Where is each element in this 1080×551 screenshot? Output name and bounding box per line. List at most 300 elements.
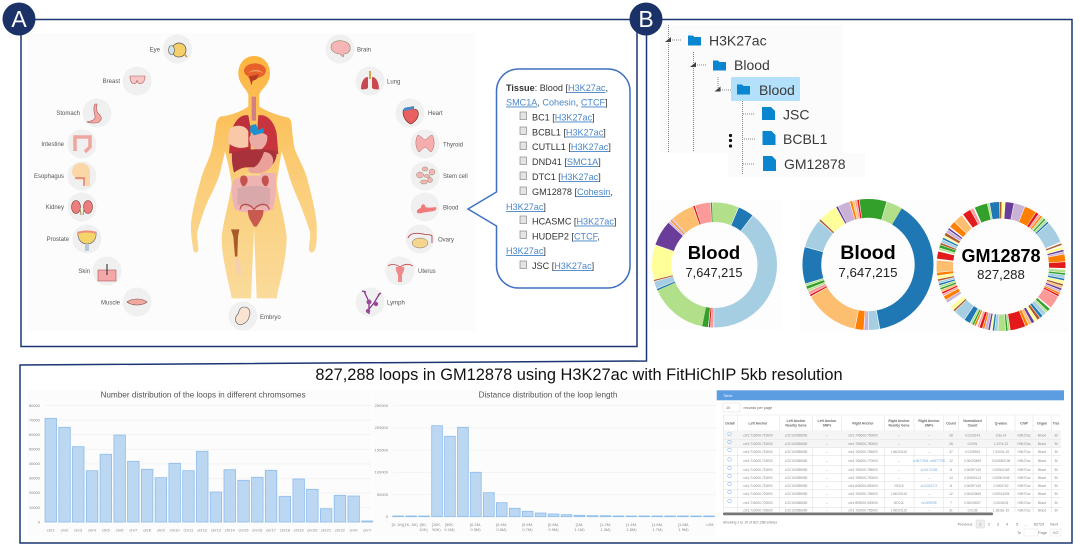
pagination: 2 <box>988 522 990 526</box>
y axis labels: 60000 <box>29 432 41 437</box>
table rows: chr1:755000-760000 <box>848 442 878 446</box>
table rows: H3K27ac <box>1017 468 1031 472</box>
icon: muscle <box>101 288 152 316</box>
table rows: -- <box>898 434 900 438</box>
table rows: chr1:760000-765000 <box>848 508 878 512</box>
x axis labels: [1.4M, <box>626 522 637 527</box>
icon: stomach <box>56 98 112 128</box>
tree labels <box>709 32 846 172</box>
column headers: Organ <box>1037 422 1047 426</box>
table rows: Bl <box>1055 434 1058 438</box>
table rows: H3K27ac <box>1017 450 1031 454</box>
icon: stem cell: Stem cell <box>443 174 468 180</box>
organ: intestines <box>232 173 276 213</box>
callout text lines: DND41 [SMC1A] <box>532 157 601 167</box>
column headers: Left Anchor <box>818 419 837 423</box>
donut: Blood (cell level, dark) <box>789 185 947 344</box>
x axis labels: [0.2M, <box>470 522 481 527</box>
table rows: chr1:745000-750000 <box>848 434 878 438</box>
y axis labels: 20000 <box>29 490 41 495</box>
badge B <box>630 2 662 36</box>
table rows: 28 <box>949 442 953 446</box>
x axis labels: 1.3M) <box>600 527 611 532</box>
icon: eye: Eye <box>150 48 161 54</box>
table rows: 28 <box>949 434 953 438</box>
table rows: H3K27ac <box>1017 501 1031 505</box>
table rows: -- <box>826 468 828 472</box>
heading: loops summary: 827,288 loops in GM12878 using H3K27ac with FitHiChIP 5kb resolution <box>315 366 843 384</box>
y axis labels: 80000 <box>29 403 41 408</box>
table rows: Blood <box>1038 468 1046 472</box>
icon: prostate <box>47 224 102 254</box>
organ: ovaries <box>240 204 269 209</box>
table rows: chr1:710000-715000 <box>743 476 773 480</box>
table rows: LOC100288069 <box>785 492 807 496</box>
icon: ovary <box>406 224 454 254</box>
organ: kidneys <box>240 175 269 186</box>
table rows: 0.00249007 <box>964 501 981 505</box>
icon: lung: Lung <box>387 80 400 86</box>
x axis labels: [0.8M, <box>548 522 559 527</box>
tree labels: H3K27ac <box>709 32 767 48</box>
callout text lines <box>506 83 616 271</box>
table rows: Bl <box>1055 501 1058 505</box>
x axis labels: >2M <box>706 522 713 527</box>
icon: blood <box>410 192 458 222</box>
table rows: Blood <box>1038 484 1046 488</box>
table rows: -- <box>898 468 900 472</box>
column headers: Nearby Gene <box>889 424 910 428</box>
pagination: Previous <box>958 522 972 526</box>
table rows: H3K27ac <box>1017 492 1031 496</box>
icon: thyroid <box>410 130 463 158</box>
badge A <box>2 2 36 36</box>
table rows: 7 <box>950 501 952 505</box>
x axis labels: chr21 <box>321 528 332 532</box>
icon: blood: Blood <box>443 206 458 212</box>
column headers: Left Anchor <box>749 422 768 426</box>
x axis labels: chr11 <box>184 528 194 532</box>
table rows: chr1:845000-850000 <box>848 484 878 488</box>
icon: prostate: Prostate <box>47 237 70 243</box>
donut: GM12878 <box>921 187 1080 346</box>
table rows: Blood <box>1038 476 1046 480</box>
table rows: -- <box>826 492 828 496</box>
table rows: Bl <box>1055 492 1058 496</box>
callout text lines: BCBL1 [H3K27ac] <box>532 128 606 138</box>
organ: breast tissue <box>228 126 248 148</box>
table rows: H3K27ac <box>1017 476 1031 480</box>
table rows: chr1:780000-785000 <box>848 468 878 472</box>
x axis labels: 1.5M) <box>626 527 637 532</box>
table rows: -- <box>928 434 930 438</box>
table rows: Blood <box>1038 450 1046 454</box>
icon: esophagus <box>34 162 96 190</box>
table rows: Blood <box>1038 492 1046 496</box>
table rows: chr1:710000-715000 <box>743 450 773 454</box>
table rows: Blood <box>1038 459 1046 463</box>
organ: left lung <box>229 115 251 153</box>
callout text lines: SMC1A, Cohesin, CTCF] <box>506 98 608 108</box>
x axis labels: chr3 <box>74 528 83 532</box>
column headers: ChIP <box>1020 422 1029 426</box>
table rows: chr1:710000-715000 <box>743 434 773 438</box>
table rows: 1.3816e-15 <box>993 508 1009 512</box>
table rows: LINC00115 <box>891 508 907 512</box>
tree labels: BCBL1 <box>783 131 828 147</box>
detail magnifier icons <box>728 432 731 503</box>
column headers: Tiss <box>1053 422 1059 426</box>
column headers: Count <box>946 422 957 426</box>
table rows: chr1:710000-715000 <box>743 484 773 488</box>
icon: kidney: Kidney <box>46 205 64 211</box>
x axis labels: [5K, <box>420 522 427 527</box>
table rows: LOC100288069 <box>785 434 807 438</box>
table rows: 1.227e-12 <box>994 442 1008 446</box>
table rows: chr1:785000-790000 <box>848 476 878 480</box>
x axis labels <box>392 522 713 532</box>
icon: intestine <box>41 130 96 158</box>
table rows: -- <box>928 442 930 446</box>
table rows: -- <box>928 450 930 454</box>
table rows: -- <box>826 484 828 488</box>
icon: brain: Brain <box>357 48 371 54</box>
table rows: Bl <box>1055 459 1058 463</box>
icon: skin: Skin <box>78 269 90 275</box>
column headers: Right Anchor <box>918 419 940 423</box>
table rows: ISG15 <box>894 484 904 488</box>
icon: lymph: Lymph <box>387 300 405 306</box>
icon: breast <box>103 66 152 96</box>
tree labels: GM12878 <box>784 156 846 172</box>
donut: GM12878: 827,288 <box>977 267 1025 282</box>
table rows <box>743 434 1058 512</box>
table rows: H3K27ac <box>1017 442 1031 446</box>
table rows: LOC100288069 <box>785 501 807 505</box>
x axis labels: [1K, 5K) <box>403 522 418 527</box>
table rows: 14 <box>949 476 953 480</box>
icon: lymph <box>356 288 405 316</box>
table rows: chr1:710000-715000 <box>743 459 773 463</box>
table rows: 7.5102e-19 <box>993 450 1009 454</box>
x axis labels: 1.9M) <box>678 527 689 532</box>
callout text lines: HCASMC [H3K27ac] <box>532 216 616 226</box>
table rows: 11 <box>949 468 953 472</box>
x axis labels: [0.6M, <box>522 522 533 527</box>
table rows: 0.00001945 <box>993 476 1010 480</box>
chart title: Distance distribution of the loop length <box>479 390 618 400</box>
table rows: chr1:715000-720000 <box>743 501 773 505</box>
icon: uterus: Uterus <box>418 269 436 275</box>
icon: uterus <box>386 256 436 286</box>
table rows: -- <box>826 508 828 512</box>
x axis labels: chr10 <box>170 528 180 532</box>
table rows: rs1005995 <box>921 501 937 505</box>
callout text lines: Tissue: Blood [H3K27ac, <box>506 83 608 93</box>
horizontal scrollbar <box>723 512 993 515</box>
organ: right lung <box>257 115 278 154</box>
table rows: -- <box>928 476 930 480</box>
chart title: Number distribution of the loops in different chromsomes <box>100 390 306 400</box>
entries summary: Showing 1 to 10 of 827,288 entries <box>723 520 777 524</box>
records per page control: 10 <box>726 406 730 410</box>
y axis labels: 40000 <box>29 461 41 466</box>
table rows: 0.0204041 <box>993 501 1009 505</box>
donut: Blood (tissue level, light) <box>640 190 789 340</box>
table rows: Blood <box>1038 442 1046 446</box>
bar chart: loop length distribution <box>373 390 716 536</box>
table rows: 0.0133143 <box>965 434 980 438</box>
striped rows <box>724 431 1061 448</box>
y axis labels: 150000 <box>375 447 389 452</box>
table rows: 0.0135923 <box>965 450 980 454</box>
x axis labels: [1M, <box>576 522 583 527</box>
callout: Blood tissue list <box>468 69 630 288</box>
expand triangles <box>665 37 720 92</box>
x axis labels: 1.1M) <box>574 527 585 532</box>
table rows: Blood <box>1038 508 1046 512</box>
y axis labels: 70000 <box>29 418 41 422</box>
table rows: Bl <box>1055 476 1058 480</box>
bar chart: loops per chromosome <box>27 390 373 536</box>
x axis labels: 1.7M) <box>652 527 663 532</box>
tree labels: Blood <box>759 82 795 98</box>
file tree <box>660 25 865 177</box>
table rows: H3K27ac <box>1017 434 1031 438</box>
organ: stomach <box>248 152 273 174</box>
column headers: Nearby Gene <box>786 424 807 428</box>
panel A frame <box>21 20 637 346</box>
x axis labels: [1.8M, <box>678 522 689 527</box>
x axis labels: [10K, <box>432 522 441 527</box>
x axis labels: [1.6M, <box>652 522 663 527</box>
x axis labels: chrX <box>349 528 358 532</box>
x axis labels: [50K, <box>445 522 454 527</box>
x axis labels: chr14 <box>225 528 235 532</box>
x axis labels: [0, 1K) <box>392 522 404 527</box>
table rows: chr1:720000-725000 <box>743 508 773 512</box>
column headers <box>725 419 1059 428</box>
table rows: LOC100288069 <box>785 459 807 463</box>
organ: heart <box>249 133 267 151</box>
table rows: 0.00433469 <box>964 459 981 463</box>
document icons <box>520 112 526 268</box>
table rows: 37 <box>949 450 953 454</box>
table rows: -- <box>826 442 828 446</box>
table rows: Blood <box>1038 434 1046 438</box>
x axis labels <box>47 528 372 532</box>
callout text lines: H3K27ac] <box>506 246 546 256</box>
x axis labels: chr15 <box>238 528 249 532</box>
icon: intestine: Intestine <box>41 142 65 148</box>
table rows: H3K27ac <box>1017 508 1031 512</box>
x axis labels: chr12 <box>197 528 208 532</box>
table rows: -- <box>826 459 828 463</box>
table rows: chr1:765000-770000 <box>848 459 878 463</box>
table rows: LOC100288069 <box>785 442 807 446</box>
table rows: chr1:760000-765000 <box>848 450 878 454</box>
table rows: -- <box>826 476 828 480</box>
x axis labels: chr6 <box>116 528 124 532</box>
y axis labels: 200000 <box>375 425 389 430</box>
x axis labels: chr17 <box>266 528 277 532</box>
y axis labels: 10000 <box>29 505 41 510</box>
organ: brain <box>244 63 266 78</box>
tree labels: JSC <box>783 106 809 122</box>
table rows: chr1:710000-715000 <box>743 468 773 472</box>
table rows: LOC100288069 <box>785 468 807 472</box>
folder and file icons <box>688 36 776 171</box>
table rows: rs12023172 <box>921 484 938 488</box>
icon: kidney <box>46 192 96 222</box>
table rows: -- <box>898 476 900 480</box>
records per page control: records per page <box>744 406 772 410</box>
table rows: 0.000060106 <box>992 459 1011 463</box>
x axis labels: chr20 <box>307 528 318 532</box>
column headers: SNPs <box>925 424 934 428</box>
table rows: 11 <box>949 484 953 488</box>
icon: breast: Breast <box>103 79 120 85</box>
table rows: -- <box>826 501 828 505</box>
table rows: Bl <box>1055 484 1058 488</box>
icon: stomach: Stomach <box>56 111 80 117</box>
pagination: GO <box>1053 531 1058 535</box>
table rows: 0.0135 <box>968 508 978 512</box>
callout text lines: CUTLL1 [H3K27ac] <box>532 142 611 152</box>
table rows: -- <box>826 434 828 438</box>
badge B: B <box>638 6 654 32</box>
pagination: 3 <box>997 522 999 526</box>
table rows: 0.00397149 <box>964 468 981 472</box>
callout text lines: BC1 [H3K27ac] <box>532 112 595 122</box>
x axis labels: chr2 <box>61 528 69 532</box>
x axis labels: 50K) <box>432 527 441 532</box>
table rows: LINC00115 <box>891 492 907 496</box>
donut center label: Blood <box>840 242 896 264</box>
x axis labels: 0.9M) <box>548 527 559 532</box>
icon: esophagus: Esophagus <box>34 174 64 180</box>
column headers: Detail <box>725 422 735 426</box>
pagination: 1 <box>979 522 981 526</box>
x axis labels: chr1 <box>47 528 55 532</box>
data table panel <box>716 390 1064 538</box>
icon: embryo <box>228 302 281 330</box>
table rows: -- <box>898 459 900 463</box>
organ: femur bone <box>231 229 239 257</box>
table rows: Bl <box>1055 468 1058 472</box>
y axis labels <box>29 403 41 524</box>
x axis labels: 0.1M) <box>444 527 455 532</box>
pagination <box>958 520 1061 536</box>
y axis labels: 250000 <box>375 403 389 408</box>
badge A: A <box>11 6 27 32</box>
table rows: rs10170285 <box>921 468 938 472</box>
bars <box>393 426 714 517</box>
table rows: -- <box>898 442 900 446</box>
column headers: Right Anchor <box>888 419 910 423</box>
icon: heart <box>396 98 443 128</box>
organ: trachea <box>252 97 256 121</box>
icon: heart: Heart <box>428 111 443 117</box>
table rows: 12 <box>949 492 953 496</box>
callout text lines: JSC [H3K27ac] <box>532 261 594 271</box>
table rows: 0.00433469 <box>964 492 981 496</box>
pagination: Page <box>1038 531 1047 535</box>
column headers: Count <box>968 424 978 428</box>
y axis labels: 50000 <box>29 447 41 452</box>
pagination: 4 <box>1006 522 1008 526</box>
y axis labels <box>375 403 389 519</box>
x axis labels: chr9 <box>157 528 166 532</box>
x axis labels: chr13 <box>211 528 222 532</box>
x axis labels: chr16 <box>252 528 263 532</box>
icon: embryo: Embryo <box>260 315 281 321</box>
tree labels: Blood <box>734 57 770 73</box>
table rows: 31 <box>949 508 953 512</box>
column headers: Q-value <box>995 422 1007 426</box>
table rows: LOC100288069 <box>785 484 807 488</box>
table header bar <box>717 390 1064 400</box>
records per page control <box>723 403 772 412</box>
table rows: Bl <box>1055 450 1058 454</box>
table rows: -- <box>928 508 930 512</box>
y axis labels: 0 <box>38 519 41 524</box>
x axis labels: 0.5M) <box>496 527 507 532</box>
table rows: -- <box>826 450 828 454</box>
icon: skin <box>78 256 122 286</box>
panel A: tissue body map <box>27 33 476 331</box>
callout text lines: DTC1 [H3K27ac] <box>532 172 601 182</box>
table rows: 12 <box>949 459 953 463</box>
table rows: chr1:715000-720000 <box>743 492 773 496</box>
table rows: 0.00004163 <box>993 468 1010 472</box>
pagination: 5 <box>1016 522 1018 526</box>
human body silhouette with organs <box>191 56 317 298</box>
icon: brain <box>326 34 371 64</box>
table grid <box>723 415 1061 512</box>
x axis labels: chr18 <box>280 528 291 532</box>
bars <box>45 418 373 522</box>
x axis labels: chrY <box>363 528 372 532</box>
pagination: 82729 <box>1034 522 1044 526</box>
table rows: -- <box>928 492 930 496</box>
icon: eye <box>150 34 192 64</box>
donut center label: Blood <box>688 242 740 263</box>
pagination: ... <box>1024 522 1028 526</box>
callout text lines: GM12878 [Cohesin, <box>532 187 613 197</box>
callout text lines: H3K27ac] <box>506 202 546 212</box>
callout text lines: HUDEP2 [CTCF, <box>532 232 600 242</box>
x axis labels: chr19 <box>294 528 304 532</box>
y axis labels: 30000 <box>29 476 41 481</box>
pagination: To <box>1017 531 1021 535</box>
x axis labels: chr8 <box>143 528 152 532</box>
table rows: LOC100288069 <box>785 450 807 454</box>
table rows: Bl <box>1055 442 1058 446</box>
icon: stem cell <box>410 162 468 190</box>
x axis labels: 0.7M) <box>522 527 533 532</box>
column headers: Normalized <box>963 419 982 423</box>
table rows: 0.0091 <box>968 442 978 446</box>
y axis labels: 0 <box>386 514 389 519</box>
table rows: 0.00490113 <box>964 476 981 480</box>
x axis labels: 0.3M) <box>470 527 481 532</box>
pagination: Next <box>1050 522 1059 526</box>
donut: Blood (tissue level, light): 7,647,215 <box>686 265 742 280</box>
table rows: LOC100288069 <box>785 508 807 512</box>
icon: ovary: Ovary <box>438 238 454 244</box>
table rows: 0.00013094 <box>993 492 1010 496</box>
